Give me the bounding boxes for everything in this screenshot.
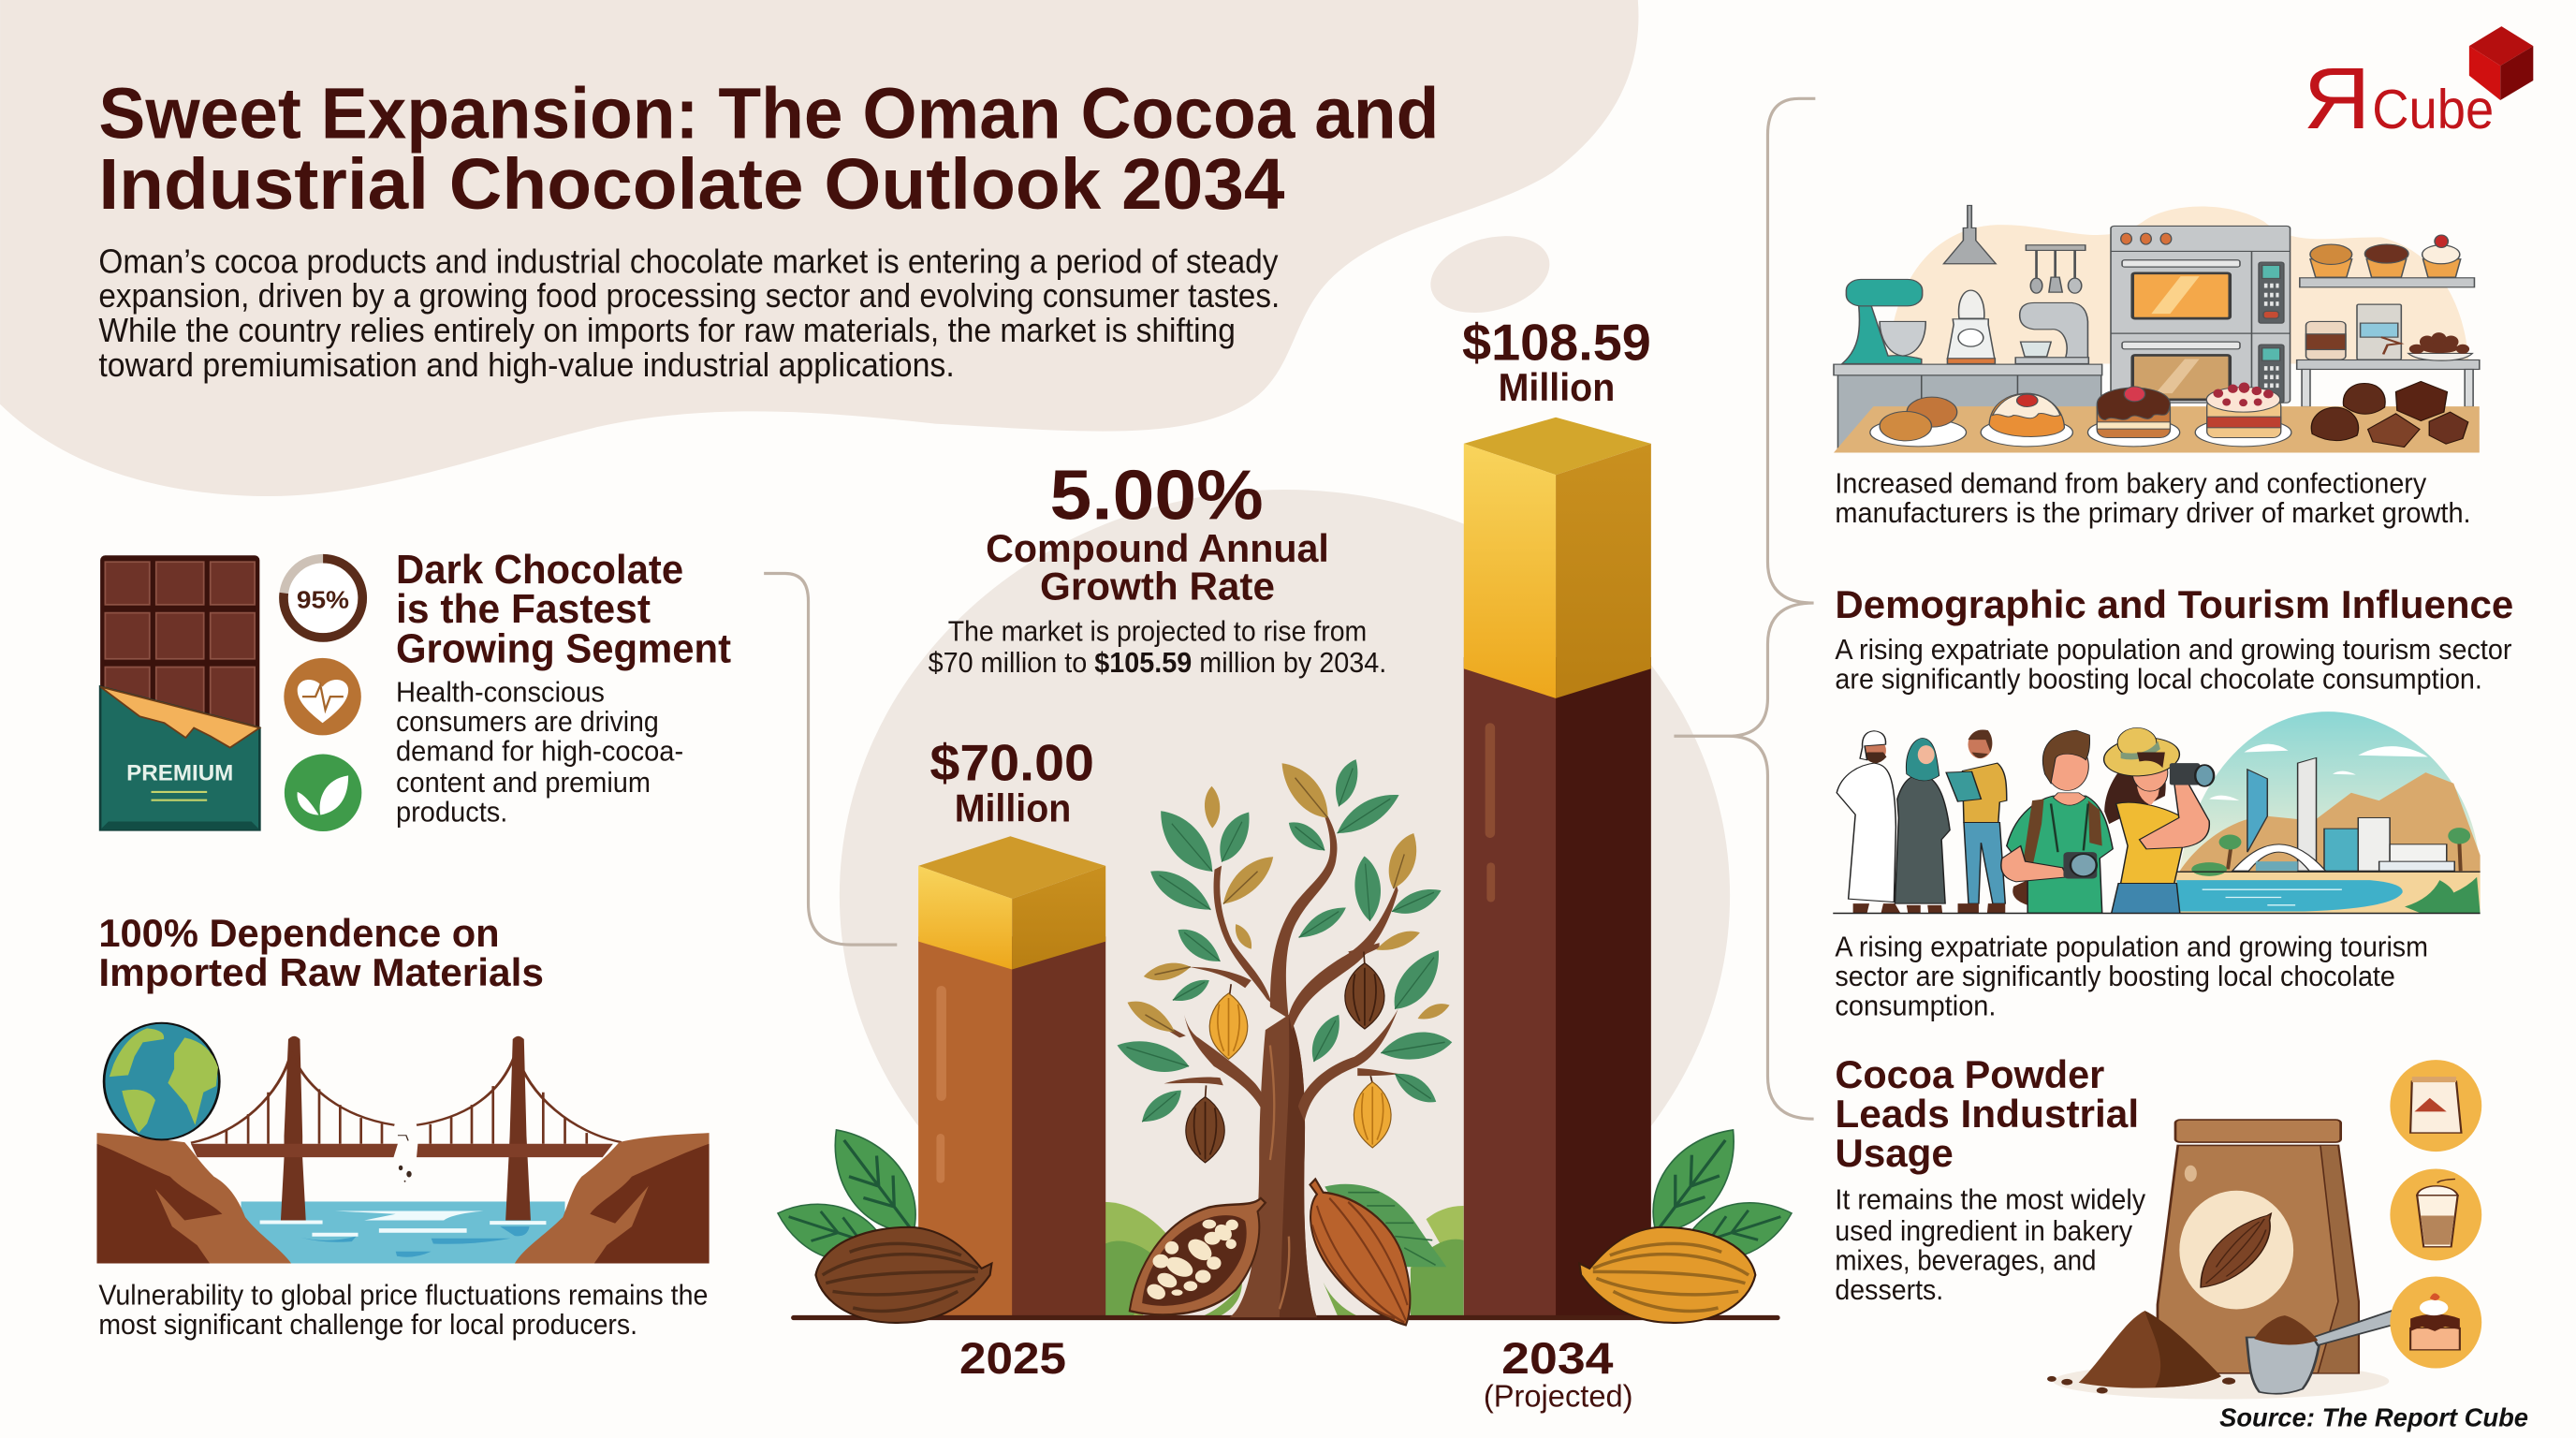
icon: chocolate bar: PREMIUM — [126, 762, 233, 786]
illustration: bakery — [1834, 205, 2480, 453]
section: cocoa powder: Cocoa Powder — [1835, 1052, 2104, 1096]
CAGR stat: The market is projected to rise from — [948, 614, 1367, 647]
illustration: cocoa powder bag, scoop and icons — [2047, 1060, 2481, 1400]
cocoa pods at base — [815, 1227, 1755, 1323]
connector bracket: right — [1674, 98, 1815, 1119]
section: dark chocolate: is the Fastest — [396, 586, 651, 632]
illustration: tourists and skyline — [1833, 712, 2481, 914]
value label: 2025 — [929, 735, 1094, 830]
text: tourism detail: consumption. — [1835, 990, 1996, 1022]
header background blob — [0, 0, 1638, 496]
icon: 95% ring — [284, 559, 362, 638]
section: cocoa powder: mixes, beverages, and — [1835, 1244, 2096, 1277]
title — [98, 73, 1439, 225]
section: dark chocolate: content and premium — [396, 766, 651, 799]
text: bakery driver: manufacturers is the primary driver of market growth. — [1835, 496, 2471, 529]
intro paragraph: Oman’s cocoa products and industrial chocolate market is entering a period of steady — [98, 242, 1278, 280]
section: dark chocolate: Dark Chocolate — [396, 547, 683, 593]
connector bracket: left — [764, 574, 897, 945]
CAGR stat: $70 million to $105.59 million by 2034. — [929, 646, 1386, 679]
axis label: 2025: 2025 — [959, 1334, 1066, 1384]
small blob — [1422, 224, 1559, 325]
section: dark chocolate: Health-conscious — [396, 675, 605, 708]
heading: imported raw materials: Imported Raw Materials — [98, 950, 544, 994]
section: demographic and tourism: Demographic and Tourism Influence — [1835, 582, 2513, 626]
intro paragraph — [98, 242, 1280, 384]
section: cocoa powder: Usage — [1835, 1131, 1954, 1175]
icon: heart — [284, 658, 361, 735]
section: dark chocolate: Growing Segment — [396, 625, 731, 671]
heading: imported raw materials: 100% Dependence on — [98, 911, 500, 955]
bar: 2034 — [1464, 418, 1651, 1318]
intro paragraph: toward premiumisation and high-value industrial applications. — [98, 345, 955, 384]
section: dark chocolate: products. — [396, 796, 507, 829]
logo: Cube — [2372, 78, 2494, 140]
section: demographic and tourism — [1835, 582, 2513, 695]
text: vulnerability — [98, 1278, 708, 1341]
section: dark chocolate — [396, 547, 731, 829]
title: Industrial Chocolate Outlook 2034 — [98, 144, 1285, 225]
text: bakery driver: Increased demand from bakery and confectionery — [1835, 467, 2427, 500]
section: cocoa powder — [1835, 1052, 2146, 1306]
illustration: cocoa tree with pods — [1117, 759, 1452, 1325]
value label: 2034: $108.59 — [1462, 314, 1651, 371]
icon: chocolate bar — [100, 555, 259, 829]
illustration: broken bridge and globe — [96, 1023, 710, 1263]
section: cocoa powder: desserts. — [1835, 1273, 1943, 1306]
green hills — [1105, 1184, 1464, 1318]
logo — [2304, 26, 2533, 147]
icon: 95% ring: 95% — [297, 585, 349, 613]
icon: leaf — [285, 755, 361, 831]
value label: 2034 — [1462, 314, 1651, 409]
section: dark chocolate: demand for high-cocoa- — [396, 735, 683, 768]
source note: Source: The Report Cube — [2219, 1402, 2528, 1431]
section: demographic and tourism: are significantly boosting local chocolate consumption. — [1835, 662, 2482, 695]
logo: Я — [2304, 50, 2371, 147]
ground line — [794, 1316, 1778, 1319]
axis label: 2034: (Projected) — [1484, 1379, 1633, 1414]
text: bakery driver — [1835, 467, 2471, 529]
intro paragraph: expansion, driven by a growing food processing sector and evolving consumer tastes. — [98, 276, 1280, 315]
CAGR stat: Growth Rate — [1040, 565, 1275, 609]
section: cocoa powder: It remains the most widely — [1835, 1183, 2146, 1216]
text: vulnerability: most significant challenge for local producers. — [98, 1308, 637, 1341]
text: tourism detail: A rising expatriate population and growing tourism — [1835, 930, 2428, 962]
section: cocoa powder: Leads Industrial — [1835, 1092, 2139, 1136]
central background circle — [840, 490, 1730, 1301]
title: Sweet Expansion: The Oman Cocoa and — [98, 73, 1439, 154]
CAGR stat — [929, 456, 1386, 679]
intro paragraph: While the country relies entirely on imports for raw materials, the market is shifting — [98, 311, 1236, 349]
axis label: 2034: 2034 — [1501, 1334, 1614, 1384]
axis label: 2034 — [1484, 1334, 1633, 1414]
text: vulnerability: Vulnerability to global price fluctuations remains the — [98, 1278, 708, 1311]
value label: 2025: Million — [955, 786, 1071, 830]
section: cocoa powder: used ingredient in bakery — [1835, 1214, 2133, 1247]
CAGR stat: Compound Annual — [986, 526, 1329, 570]
text: tourism detail: sector are significantly boosting local chocolate — [1835, 960, 2395, 992]
section: demographic and tourism: A rising expatriate population and growing tourism sector — [1835, 633, 2511, 666]
section: dark chocolate: consumers are driving — [396, 705, 659, 738]
base leaves — [769, 1112, 1799, 1274]
CAGR stat: 5.00% — [1050, 456, 1264, 535]
heading: imported raw materials — [98, 911, 544, 994]
bar: 2025 — [918, 836, 1105, 1318]
value label: 2034: Million — [1499, 365, 1615, 409]
text: tourism detail — [1835, 930, 2428, 1022]
value label: 2025: $70.00 — [929, 735, 1094, 792]
